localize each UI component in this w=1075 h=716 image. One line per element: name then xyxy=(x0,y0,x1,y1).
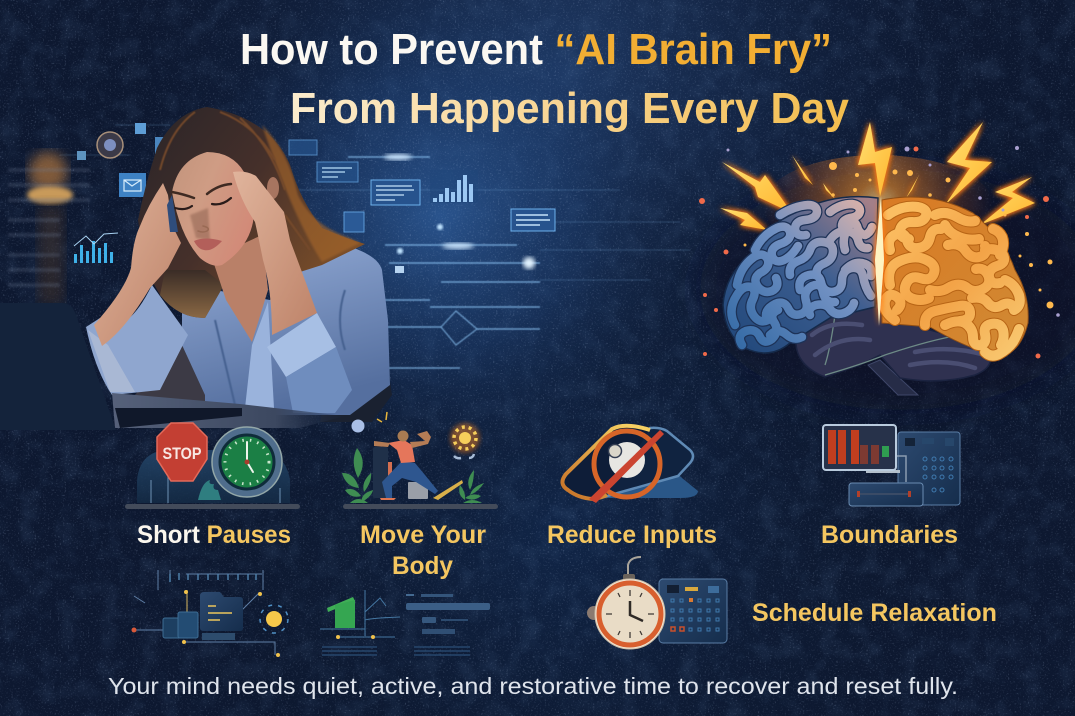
label: move your body: Body xyxy=(392,552,453,580)
box xyxy=(408,482,428,499)
icon: person exercising xyxy=(342,412,498,509)
shirt placket and folds xyxy=(245,302,274,408)
legs xyxy=(382,461,438,498)
icon: green bin and data bars xyxy=(320,590,490,655)
label: schedule relaxation: Schedule Relaxation xyxy=(752,599,997,627)
orange burst behind brain xyxy=(763,155,993,255)
title xyxy=(240,25,850,133)
lower brain: brainstem, temporal lobe and cerebellum xyxy=(868,360,918,395)
face xyxy=(172,152,254,266)
title: From Happening Every Day xyxy=(290,84,850,133)
desk xyxy=(112,393,345,428)
left hand and forearm xyxy=(94,183,181,346)
label: move your body xyxy=(360,521,486,580)
icon: circuit folder and sun xyxy=(132,570,288,657)
chair / back shadow xyxy=(320,300,392,422)
right cuff xyxy=(267,313,336,377)
icon: computer with boundaries xyxy=(823,425,960,506)
illustration: brain with lightning xyxy=(699,122,1060,395)
footer caption: Your mind needs quiet, active, and restorative time to recover and reset fully. xyxy=(108,673,958,699)
laptop xyxy=(0,303,116,430)
ear xyxy=(267,177,279,199)
label: short pauses: Short Pauses xyxy=(137,521,291,549)
illustration: stressed woman holding her head at a laptop xyxy=(0,107,392,430)
label: move your body: Move Your xyxy=(360,521,486,549)
shirt body xyxy=(182,245,390,415)
stop sign xyxy=(157,423,207,481)
icon: stop sign and clock xyxy=(125,423,300,509)
left sleeve xyxy=(86,285,188,395)
pillar xyxy=(373,447,388,498)
icon: crossed-out input xyxy=(562,426,698,503)
icon: stop sign and clock: STOP xyxy=(162,444,202,463)
bright centre crack xyxy=(875,196,884,326)
left hemisphere (blue) xyxy=(723,197,878,353)
title: How to Prevent “AI Brain Fry” xyxy=(240,25,832,74)
sparks xyxy=(699,146,1060,358)
mouth xyxy=(194,238,222,250)
hair back xyxy=(138,107,365,318)
torso, head, arms xyxy=(388,440,415,463)
eyes, brows and nose xyxy=(172,184,231,232)
label: reduce inputs: Reduce Inputs xyxy=(547,521,717,549)
neck xyxy=(212,235,268,342)
icon: stopwatch and calendar xyxy=(587,557,727,649)
right hemisphere (orange) xyxy=(882,197,1028,357)
blurred desk lamp and left-side data panels xyxy=(8,123,167,305)
dim wall behind the arms xyxy=(132,345,205,405)
icons: lightning bolts xyxy=(720,122,1035,230)
clock xyxy=(212,427,282,497)
right hand and forearm xyxy=(233,172,317,335)
plants xyxy=(342,448,484,503)
label: boundaries: Boundaries xyxy=(821,521,958,549)
background data hud: panels, charts and light streaks xyxy=(60,125,690,368)
